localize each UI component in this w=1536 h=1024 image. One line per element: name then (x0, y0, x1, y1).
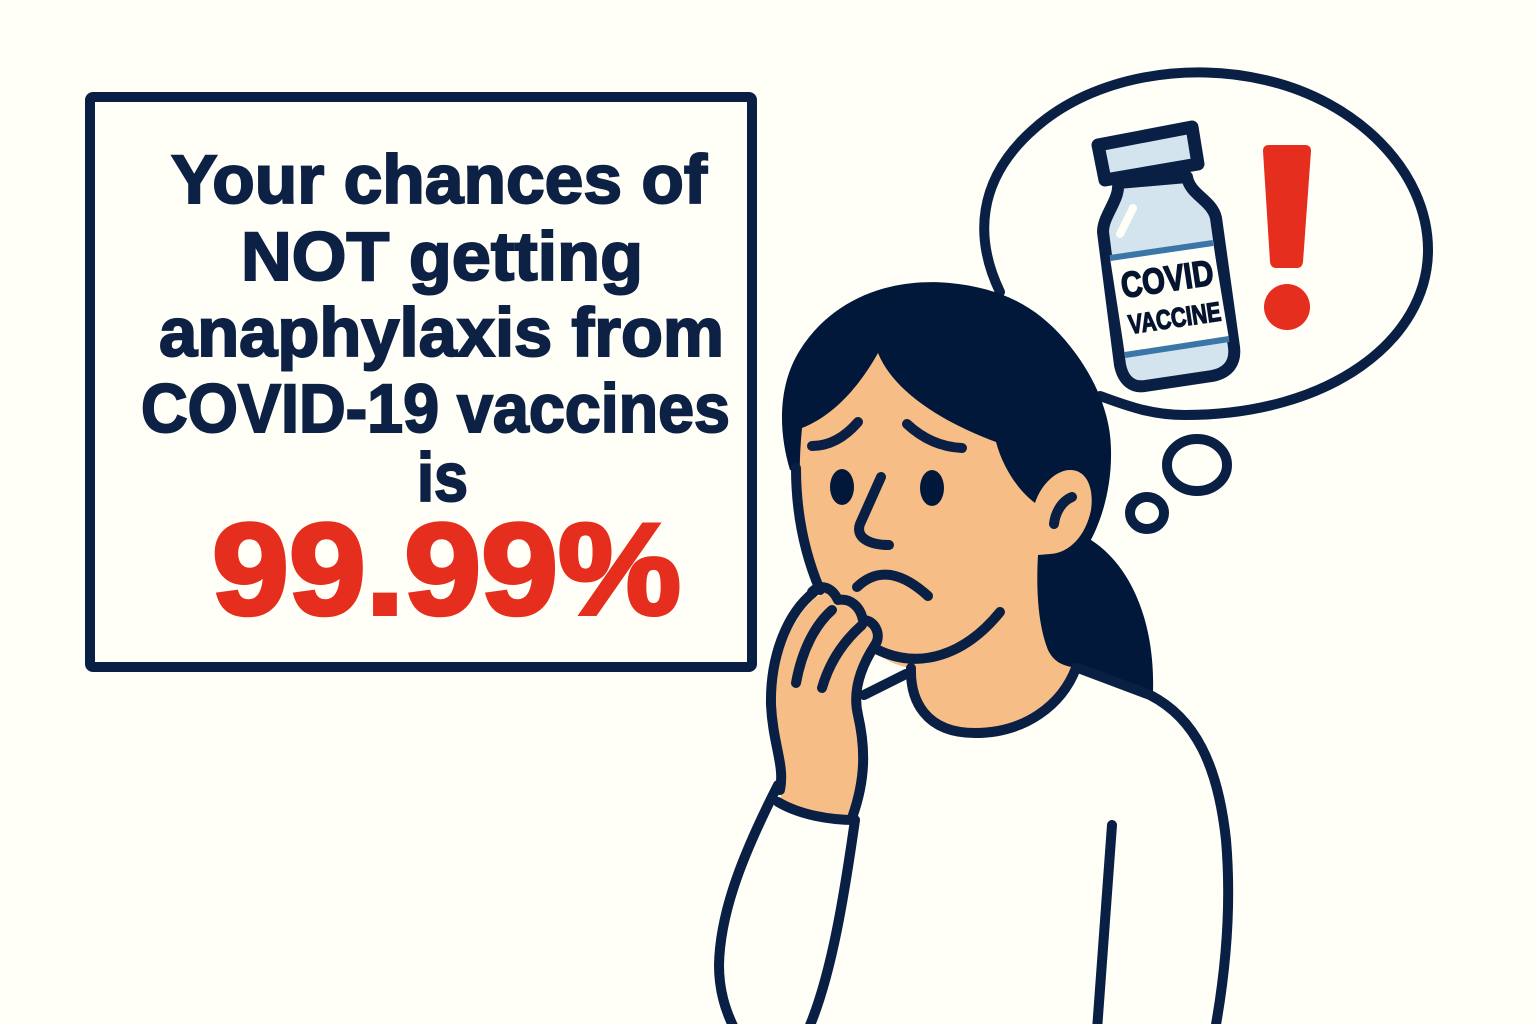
shirt (721, 668, 1229, 1024)
vial cap (1098, 127, 1198, 180)
left arm outer (719, 785, 778, 1024)
ear detail (1054, 497, 1072, 524)
right eyebrow (907, 424, 962, 448)
heading: chances of not getting anaphylaxis: is (417, 439, 468, 516)
cuff (778, 802, 855, 820)
vial label: VACCINE: VACCINE (1126, 297, 1223, 340)
right eye (920, 470, 944, 506)
thought bubble: large circle (1167, 439, 1227, 491)
heading: chances of not getting anaphylaxis: Your chances of (171, 141, 708, 218)
left eye (830, 469, 854, 505)
icon: exclamation mark (1263, 145, 1311, 330)
statistic: 99.99%: 99.99% (212, 496, 681, 642)
left arm inner (808, 820, 855, 1024)
torso fold (1097, 825, 1112, 1024)
hand (773, 592, 875, 820)
illustration: worried woman (719, 282, 1229, 1024)
right shoulder (1078, 668, 1228, 1024)
shirt collar line left (864, 674, 906, 695)
jaw line (796, 468, 820, 590)
mouth (857, 575, 928, 596)
heading: chances of not getting anaphylaxis: anaphylaxis from (159, 294, 724, 371)
neck and collar (911, 668, 1076, 733)
heading: chances of not getting anaphylaxis (141, 141, 730, 516)
vial glare (1120, 208, 1133, 234)
heading: chances of not getting anaphylaxis: NOT getting (241, 218, 643, 295)
face (800, 353, 1092, 733)
hair (782, 282, 1111, 545)
ponytail (1020, 540, 1153, 692)
left eyebrow (812, 422, 858, 446)
icon: covid vaccine vial (1098, 127, 1234, 386)
heading: chances of not getting anaphylaxis: COVID-19 vaccines (141, 370, 730, 447)
vial label: COVID: COVID (1118, 252, 1216, 306)
thought bubble: small circle (1130, 497, 1164, 529)
thought bubble (984, 72, 1428, 529)
chin line (878, 612, 1000, 659)
panel: statistic box (90, 97, 752, 667)
nose (859, 477, 889, 545)
fingers (796, 610, 862, 688)
hand outline (771, 587, 878, 815)
